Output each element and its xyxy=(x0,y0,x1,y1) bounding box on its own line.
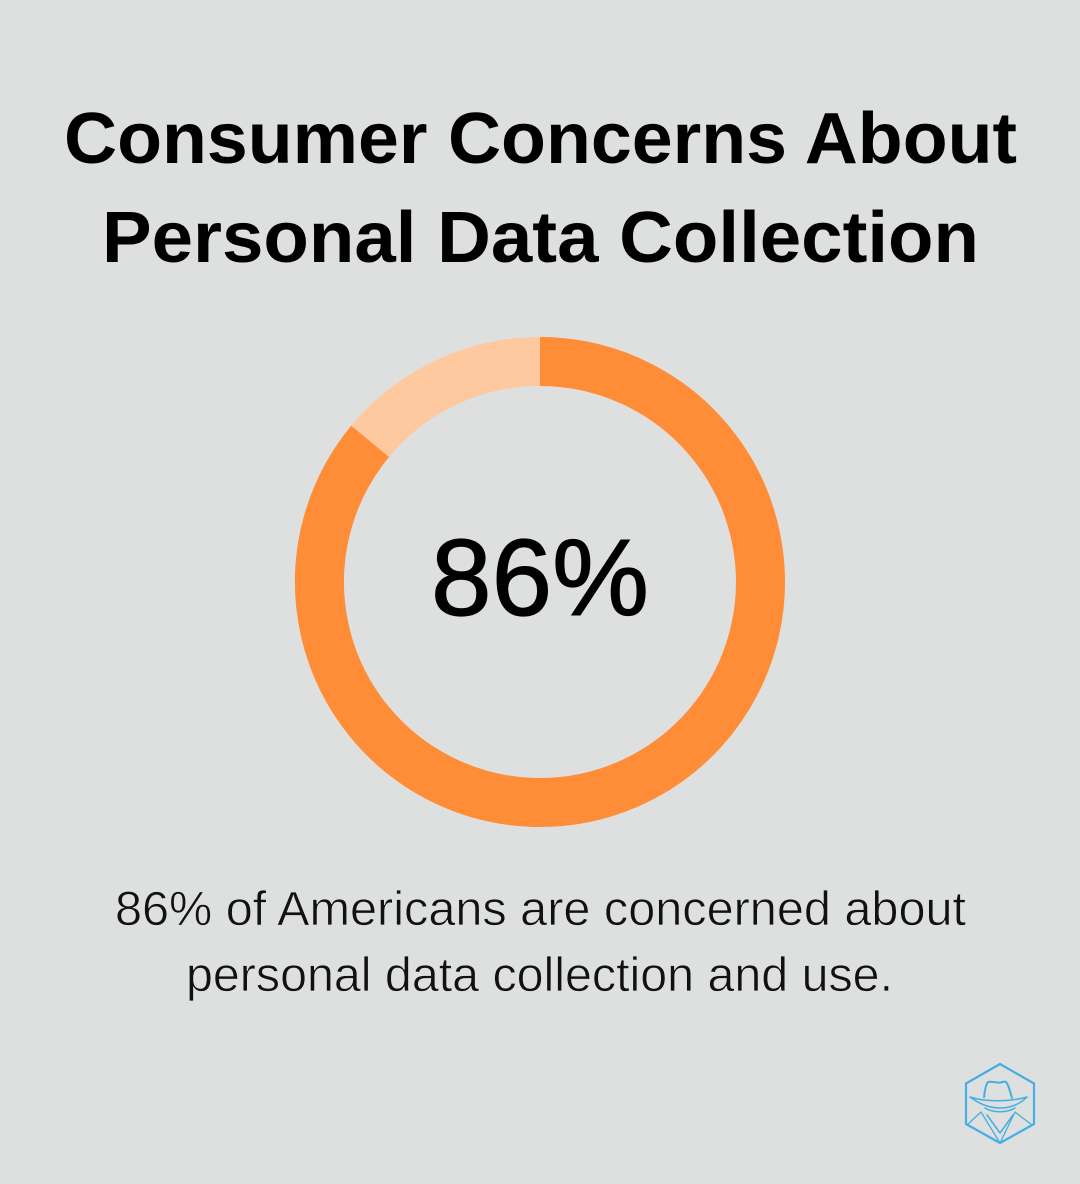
remaining 14% segment xyxy=(320,362,760,802)
title: Personal Data Collection xyxy=(102,198,979,278)
description xyxy=(115,883,966,1002)
title xyxy=(64,99,1017,278)
title: Consumer Concerns About xyxy=(64,99,1017,179)
highlighted 86% segment xyxy=(319,362,760,802)
center value: 86% xyxy=(431,517,649,639)
icon: spy logo hexagon xyxy=(966,1064,1034,1143)
description: personal data collection and use. xyxy=(186,949,893,1002)
description: 86% of Americans are concerned about xyxy=(115,883,966,936)
donut chart: 86% xyxy=(319,362,760,802)
